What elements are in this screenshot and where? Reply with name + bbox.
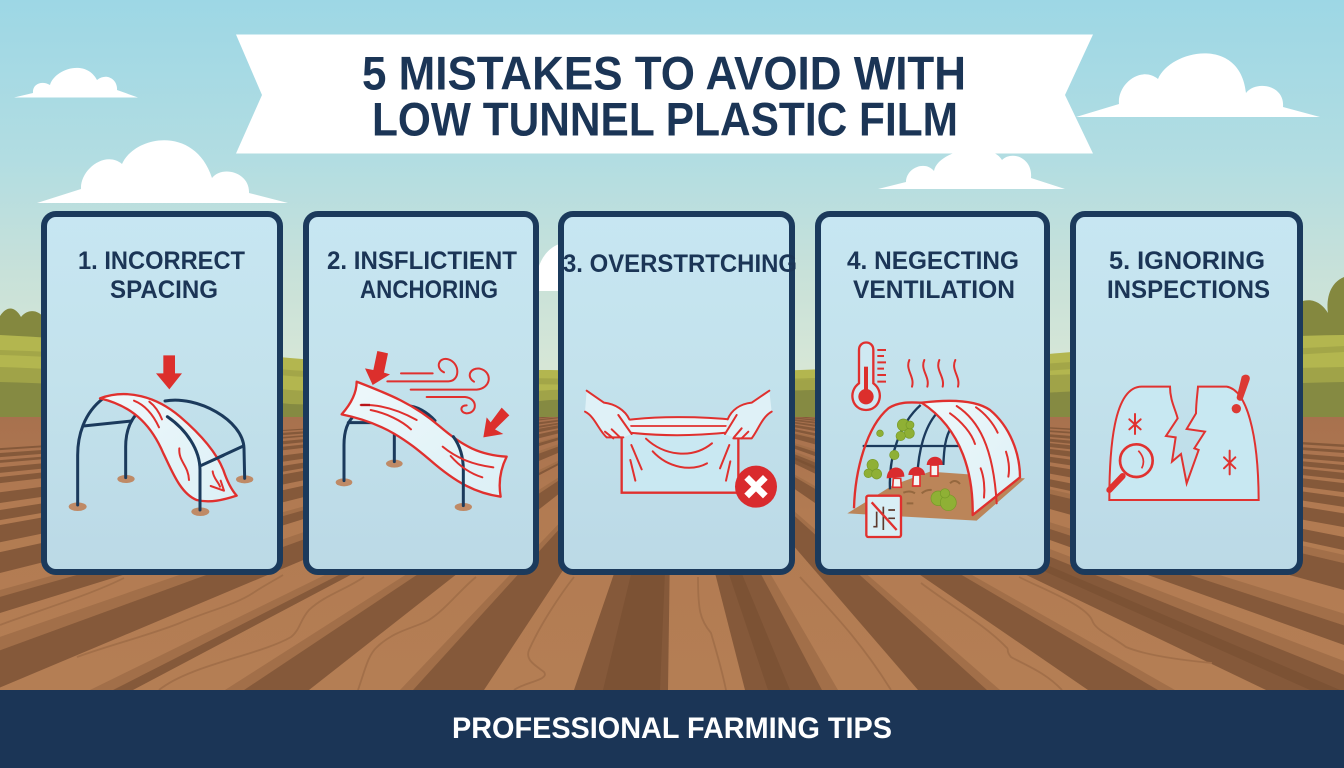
soil cracks xyxy=(0,575,1212,690)
soil bed xyxy=(847,472,1025,521)
icon: film blowing off hoops in wind xyxy=(336,351,509,511)
heading: panel 2: ANCHORING xyxy=(360,276,498,304)
icon: torn film with magnifier and warning xyxy=(1109,375,1259,500)
title line 2: LOW TUNNEL PLASTIC FILM xyxy=(372,92,958,146)
background: sky xyxy=(0,0,1344,380)
title banner xyxy=(236,34,1093,154)
heading: panel 1: SPACING xyxy=(110,276,218,304)
heading: panel 4: VENTILATION xyxy=(853,276,1015,304)
icon: sagging film on widely spaced hoops xyxy=(69,355,253,516)
soil field with perspective furrows xyxy=(0,405,1344,692)
heading: panel 4 xyxy=(847,247,1019,304)
icon: unventilated tunnel with heat, mold and mushrooms xyxy=(847,342,1025,537)
heading: panel 4: 4. NEGECTING xyxy=(847,247,1019,275)
heading: panel 3: 3. OVERSTRTCHING xyxy=(563,250,797,278)
heading: panel 5 xyxy=(1107,247,1270,304)
heading: panel 5: INSPECTIONS xyxy=(1107,276,1270,304)
mold patches xyxy=(864,419,956,511)
panel 4: neglecting ventilation xyxy=(818,214,1047,572)
cloud: under banner xyxy=(878,149,1065,189)
panel 5: ignoring inspections xyxy=(1073,214,1300,572)
heading: panel 2: 2. INSFLICTIENT xyxy=(327,247,517,275)
cloud: upper left xyxy=(14,68,138,98)
darker furrow bands xyxy=(0,405,1344,690)
footer bar xyxy=(0,690,1344,768)
cloud: upper right xyxy=(1076,53,1320,117)
heading: panel 2 xyxy=(327,247,517,304)
green fields xyxy=(0,335,1344,420)
panel 1: incorrect spacing xyxy=(44,214,280,572)
thermometer xyxy=(852,342,886,410)
mushrooms xyxy=(887,457,943,487)
icon: hands overstretching film with red X xyxy=(585,391,777,508)
panel 3: overstretching xyxy=(561,214,797,572)
heading: panel 1 xyxy=(78,247,245,304)
heading: panel 5: 5. IGNORING xyxy=(1109,247,1265,275)
cloud: lower left xyxy=(37,140,288,203)
heading: panel 1: 1. INCORRECT xyxy=(78,247,245,275)
cloud: behind panel 3 xyxy=(535,242,575,291)
furrow shadow strips xyxy=(603,458,1339,690)
no vent sign xyxy=(866,496,901,537)
trees on the horizon xyxy=(0,277,1344,345)
tunnel film xyxy=(922,401,1020,515)
title line 1: 5 MISTAKES TO AVOID WITH xyxy=(362,46,966,100)
hoops xyxy=(863,405,962,489)
footer text: PROFESSIONAL FARMING TIPS xyxy=(452,712,892,745)
heat waves xyxy=(908,360,958,387)
mid-tone furrow edges xyxy=(0,434,1344,690)
panel 2: insufficient anchoring xyxy=(306,214,536,572)
